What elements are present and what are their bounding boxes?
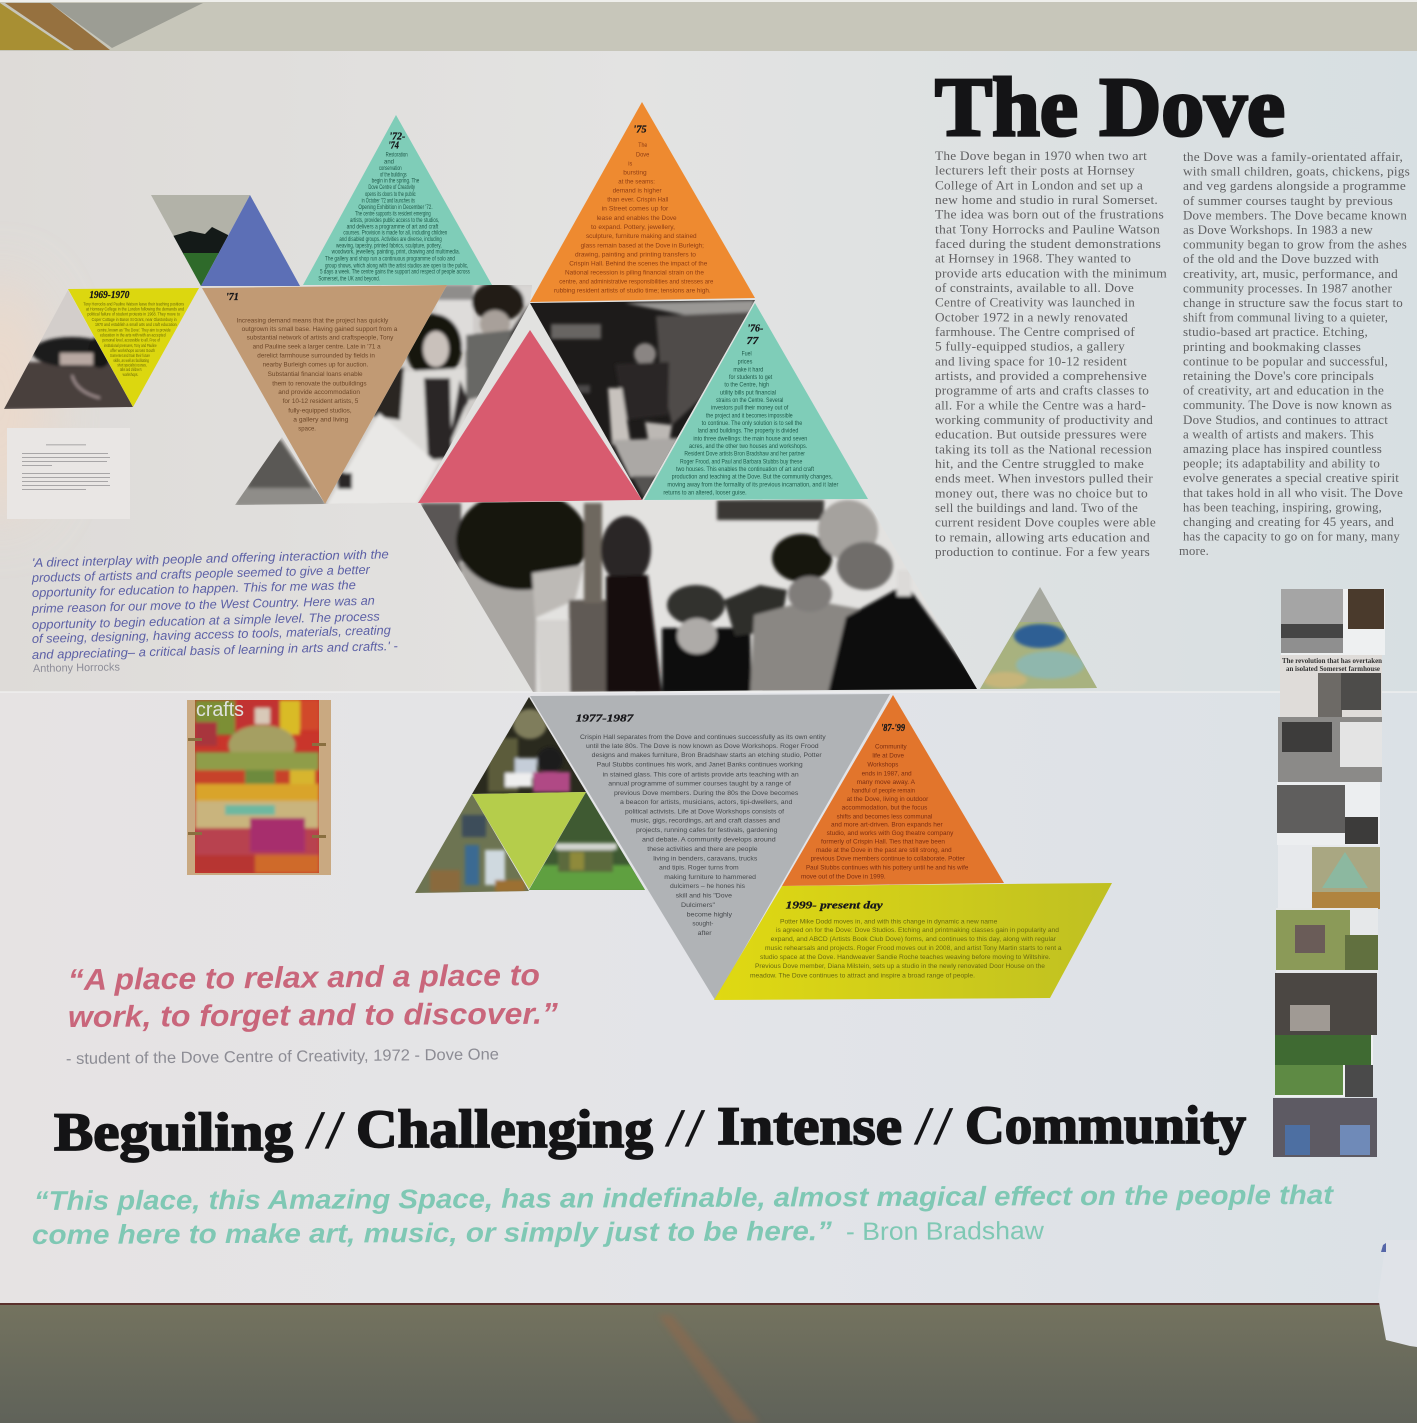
text: 1975 paragraph <box>554 142 714 294</box>
text: 1999 paragraph <box>750 919 1062 980</box>
text block: history column one: at Hornsey in 1968. They wanted to <box>935 251 1131 266</box>
text: 1969-1970 paragraph: 1970 and establish a small arts and craft education <box>95 322 177 327</box>
text: 1971 paragraph: and Pauline seek a larger centre. Late in '71 a <box>253 344 381 351</box>
text block: history column two: that takes hold in all who visit. The Dove <box>1183 485 1403 500</box>
text: 72-74 paragraph: 5 days a week. The centre gains the support and respect of people across <box>320 269 470 276</box>
text block: history column one: that Tony Horrocks and Pauline Watson <box>935 221 1160 236</box>
text: 87-99 paragraph: Community <box>875 744 907 751</box>
text: 87-99 paragraph: and more art-driven. Bron expands her <box>831 821 943 828</box>
text: 1971 paragraph: them to renovate the outbuildings <box>272 380 367 387</box>
text block: history column two: evolve generates a special creative spirit <box>1183 470 1399 485</box>
text block: history column two: Dove Studios, and continues to attract <box>1183 412 1388 427</box>
text: 72-74 paragraph: courses. Provision is made for all, including children <box>343 229 448 236</box>
text: 1975 paragraph: Dove <box>636 151 650 158</box>
triangle: 1972-1974 <box>303 115 492 285</box>
text block: history column one: to remain, allowing arts education and <box>935 529 1150 544</box>
text: 1971 paragraph: a gallery and living <box>293 416 349 423</box>
text: 1977-1987 paragraph: until the late 80s. The Dove is now known as Dove Workshops. Roger Frood <box>586 743 819 750</box>
text: 1969-1970 paragraph: personal level, accessible to all. Free of <box>102 338 160 343</box>
text block: history column two: has the capacity to go on for many, many <box>1183 529 1400 544</box>
text block: history column two: and veg gardens alongside a programme <box>1183 178 1406 193</box>
text block: history column two: of the old and the Dove buzzed with <box>1183 251 1379 266</box>
text: 1977-1987 paragraph: Crispin Hall separates from the Dove and continues successfully as its own entity <box>580 734 827 741</box>
quote: Anthony Horrocks: Anthony Horrocks <box>33 661 121 675</box>
text: 87-99 paragraph: Workshops <box>867 761 898 768</box>
heading: 76-77 <box>747 324 763 347</box>
text block: history column one: faced during the student demonstrations <box>935 236 1161 251</box>
parallelogram: 1999 to present day <box>714 883 1112 1000</box>
text block: history column two: as Dove Workshops. In 1983 a new <box>1183 222 1373 237</box>
text: 87-99 paragraph: formerly of Crispin Hall. Ties that have been <box>821 838 945 845</box>
text: 76-77 paragraph: the project and it becomes impossible <box>706 412 793 419</box>
text: 1969-1970 paragraph: workshops. <box>123 372 138 377</box>
text block: history column one: and living space for 10-12 resident <box>935 353 1127 368</box>
attribution: Bron Bradshaw: - Bron Bradshaw <box>846 1217 1045 1246</box>
text: 72-74 paragraph: woodwork, jewellery, painting, print, drawing and multimedia. <box>331 249 460 256</box>
text block: history column one: sell the buildings and land. Two of the <box>935 500 1138 515</box>
heading: 76-77: 77 <box>747 336 759 347</box>
text: 1999 paragraph: studio space at the Dove. Handweaver Sandie Roche teaches weaving before moving to Wiltshire. <box>760 954 1051 961</box>
text: 72-74 paragraph: weaving, tapestry, printed fabrics, sculpture, pottery, <box>335 242 442 249</box>
text block: history column two <box>1179 149 1410 558</box>
text: 1975 paragraph: to expand. Pottery, jewellery, <box>591 224 675 231</box>
text: 72-74 paragraph: conservation <box>379 165 402 172</box>
quote: Anthony Horrocks: and appreciating– a critical basis of learning in arts and crafts.' - <box>32 639 398 662</box>
text: 1969-1970 paragraph: institutional pressures, Tony and Pauline <box>104 343 157 348</box>
text: 76-77 paragraph: into three dwellings: the main house and seven <box>693 435 808 442</box>
text block: history column one: money out, there was no choice but to <box>935 485 1148 500</box>
text block: history column one: The Dove began in 1970 when two art <box>935 148 1147 163</box>
text: 1977-1987 paragraph: dulcimers – he hones his <box>670 883 745 890</box>
text block: history column one: artists, and provided a comprehensive <box>935 368 1147 383</box>
triangle: lime <box>472 792 586 889</box>
text block: history column two: community began to grow from the ashes <box>1183 237 1407 252</box>
quote: Anthony Horrocks: 'A direct interplay with people and offering interaction with the <box>32 547 389 570</box>
text: 76-77 paragraph: prices <box>738 359 752 366</box>
background: floor <box>0 1304 1417 1423</box>
text: 72-74 paragraph: Dove Centre of Creativity <box>368 184 416 191</box>
triangle: 1976-1977 <box>644 303 868 500</box>
text: 87-99 paragraph: Paul Stubbs continues with his pottery until he and his wife <box>806 864 969 871</box>
text: 1975 paragraph: than ever. Crispin Hall <box>607 197 668 204</box>
text block: history column one: of constraints, available to all. Dove <box>935 280 1134 295</box>
text block: history column two: changing and creating for 45 years, and <box>1183 514 1394 529</box>
text block: history column one: provide arts education with the minimum <box>935 265 1167 280</box>
text: 1975 paragraph: in Street comes up for <box>602 206 668 213</box>
text: 1975 paragraph: glass remain based at the Dove in Burleigh; <box>581 242 704 249</box>
text block: history column two: continue to be popular and successful, <box>1183 353 1388 368</box>
triangle: 1971 <box>202 285 447 504</box>
text: 1969-1970 paragraph: Somerset and train their future <box>110 353 150 358</box>
text block: history column two: with small children, goats, chickens, pigs <box>1183 164 1410 179</box>
text: 76-77 paragraph: to the Centre, high <box>724 382 769 389</box>
text: 87-99 paragraph: ends in 1987, and <box>862 770 912 777</box>
text: 87-99 paragraph: move out of the Dove in 1999. <box>801 873 886 880</box>
text block: history column two: change in structure saw the focus start to <box>1183 295 1403 310</box>
triangle: blue <box>201 195 300 286</box>
text: 1975 paragraph: demand is higher <box>613 188 662 195</box>
text: 1969-1970 paragraph: Tony Horrocks and Pauline Watson leave their teaching positions <box>83 301 184 306</box>
heading: 1969-1970: 1969-1970 <box>89 290 129 301</box>
text: 1971 paragraph <box>237 318 398 433</box>
text block: history column one <box>935 148 1167 559</box>
text block: history column two: creativity, art, music, performance, and <box>1183 266 1398 281</box>
text: 1977-1987 paragraph: become highly <box>687 911 733 918</box>
text block: history column one: working community of productivity and <box>935 412 1153 427</box>
quote: Bron Bradshaw: “This place, this Amazing Space, has an indefinable, almost magical effect on the people that <box>34 1180 1334 1216</box>
heading: 1975: '75 <box>633 125 647 136</box>
headline: four keywords <box>54 1095 1246 1162</box>
text: 1999 paragraph: is agreed on for the Dove: Dove Studios. Etching and printmaking classes gain in popularity and <box>776 927 1059 934</box>
text block: history column two: a wealth of artists and makers. This <box>1183 426 1374 441</box>
text: 1971 paragraph: outgrown its small base. Having gained support from a <box>242 326 398 333</box>
text: 72-74 paragraph: The centre supports its resident emerging <box>355 211 431 218</box>
text: 1975 paragraph: The <box>638 142 648 149</box>
text: 76-77 paragraph: acres, and the other two houses and workshops. <box>689 443 808 450</box>
text block: history column one: hit, and the Centre struggled to make <box>935 456 1144 471</box>
text: 1999 paragraph: meadow. The Dove continues to attract and inspire a broad range of people. <box>750 973 975 980</box>
text: 76-77 paragraph: strains on the Centre. Several <box>716 397 783 404</box>
quote: Anthony Horrocks: prime reason for our move to the West Country. Here was an <box>31 594 375 616</box>
text: 76-77 paragraph: utility bills put financial <box>720 389 776 396</box>
text: 76-77 paragraph: for students to get <box>729 374 773 381</box>
text: 76-77 paragraph: investors pull their money out of <box>711 405 789 412</box>
quote: Bron Bradshaw: come here to make art, music, or simply just to be here.” <box>32 1216 833 1250</box>
photo: house and lawn <box>150 194 252 288</box>
text: 72-74 paragraph: artists, provides public access to the studios, <box>350 217 439 224</box>
text: 1977-1987 paragraph: and debate. A community develops around <box>642 837 776 844</box>
text: 1975 paragraph: rubbing resident artists of studio time; tensions are high. <box>554 287 711 294</box>
text: 1969-1970 paragraph: talks and children's <box>120 367 142 372</box>
text: 1977-1987 paragraph <box>580 734 827 937</box>
heading: 1971: '71 <box>226 292 239 303</box>
text: 72-74 paragraph: opens its doors to the public <box>365 191 416 198</box>
text: 1969-1970 paragraph: short specialist courses, <box>117 362 147 367</box>
text block: history column one: production to continue. For a few years <box>935 544 1150 559</box>
text block: history column one: ends meet. When investors pulled their <box>935 471 1153 486</box>
text: 1977-1987 paragraph: after <box>698 930 712 937</box>
text: 1977-1987 paragraph: in stained glass. This core of artists provide arts teaching with an <box>603 771 799 778</box>
quote: Anthony Horrocks: opportunity to begin education at a simple level. The process <box>32 610 380 632</box>
text block: history column two: has been teaching, inspiring, growing, <box>1183 499 1382 514</box>
text: 1971 paragraph: space. <box>298 426 316 433</box>
text: 1969-1970 paragraph: political failure of student protests in 1968. They move to <box>87 312 180 317</box>
photo: man and girl at workshop <box>470 695 588 795</box>
magazine: crafts cover on board <box>187 699 331 875</box>
text: 76-77 paragraph: returns to an altered, looser guise. <box>663 489 747 496</box>
text: 1977-1987 paragraph: these activities and there are people <box>647 846 758 853</box>
text block: history column one: Centre of Creativity was launched in <box>935 295 1135 310</box>
text block: history column one: all. For a while the Centre was a hard- <box>935 397 1146 412</box>
text: 87-99 paragraph: many move away. A <box>857 779 916 786</box>
quote: Bron Bradshaw <box>32 1180 1334 1250</box>
text: 1999 paragraph: Previous Dove member, Diana Milstein, sets up a studio in the newly renovated Door House on the <box>755 963 1045 970</box>
text: 1969-1970 paragraph: education in the arts with with an accepted <box>100 332 166 337</box>
headline: four keywords: // <box>665 1098 705 1158</box>
text: 72-74 paragraph: and <box>384 158 394 165</box>
text block: history column two: printing and bookmaking classes <box>1183 339 1361 354</box>
quote: Anthony Horrocks: of seeing, designing, having access to tools, materials, creating <box>32 623 391 646</box>
text: 1971 paragraph: substantial network of artists and craftspeople, Tony <box>247 335 394 342</box>
text: 72-74 paragraph: The gallery and shop run a continuous programme of solo and <box>325 255 455 262</box>
text: 76-77 paragraph: production and teaching at the Dove. But the community changes, <box>672 474 833 481</box>
text: 1977-1987 paragraph: designs and makes furniture, Bron Bradshaw starts an etching studio, Potter <box>592 752 822 759</box>
text: 1977-1987 paragraph: projects, running cafes for festivals, gardening <box>636 827 778 834</box>
text: 1971 paragraph: Increasing demand means that the project has quickly <box>237 318 389 325</box>
text: 1971 paragraph: and provide accommodation <box>278 389 360 396</box>
text block: history column one: The idea was born out of the frustrations <box>935 207 1164 222</box>
text: 76-77 paragraph: Roger Frood, and Paul and Barbara Stubbs buy these <box>680 458 803 465</box>
heading: 1977-1987: 1977-1987 <box>576 713 635 724</box>
text: 1999 paragraph: music rehearsals and projects. Roger Frood moves out in 2008, and artist Tony Martin starts to rent a <box>765 945 1062 952</box>
photo: painted car in triangle <box>978 585 1100 690</box>
text: 76-77 paragraph: two houses. This enables the continuation of art and craft <box>676 466 814 473</box>
magazine masthead: crafts <box>196 699 244 721</box>
heading: 72-74: '72- <box>389 131 405 142</box>
text: 72-74 paragraph: Restoration <box>386 152 408 159</box>
text: 1977-1987 paragraph: Paul Stubbs continues his work, and Janet Banks continues working <box>597 761 803 768</box>
text block: history column one: farmhouse. The Centre comprised of <box>935 324 1135 339</box>
headline: four keywords: Community <box>965 1095 1246 1155</box>
text: 1977-1987 paragraph: previous Dove members. During the 80s the Dove becomes <box>614 790 798 797</box>
text: 1975 paragraph: at the seams: <box>618 179 655 186</box>
text: 76-77 paragraph: make it hard <box>733 366 764 373</box>
triangle: 1975 <box>530 102 755 302</box>
text: 72-74 paragraph: of the buildings <box>380 171 407 178</box>
text block: history column one: education. But outside pressures were <box>935 427 1147 442</box>
text: 1977-1987 paragraph: skill and his "Dove <box>676 893 732 900</box>
quote: Anthony Horrocks: opportunity for education to happen. This for me was the <box>32 578 356 600</box>
photo: children gathered <box>415 490 985 694</box>
text block: history column two: studio-based art practice. Etching, <box>1183 324 1368 339</box>
photo: couple, paper and landscape <box>230 282 535 507</box>
text: 87-99 paragraph: made at the Dove in the past are still strong, and <box>816 847 952 854</box>
text: 1969-1970 paragraph: Coper Cottage in Baron St Grant, near Glastonbury in <box>92 317 177 322</box>
text: 1971 paragraph: derelict farmhouse surrounded by fields in <box>257 353 375 360</box>
quote: Anthony Horrocks: products of artists and crafts people seemed to give a better <box>31 563 371 585</box>
text: 1969-1970 paragraph: centre, known as 'The Dove'. They aim to provide <box>97 327 171 332</box>
text block: history column one: taking its toll as the National recession <box>935 441 1152 456</box>
text: 1971 paragraph: fully-equipped studios, <box>288 407 352 414</box>
collage: folded photo strip <box>1273 589 1385 1157</box>
text block: history column two: people; its adaptability and ability to <box>1183 456 1380 471</box>
text: 1977-1987 paragraph: making furniture to hammered <box>664 874 756 881</box>
photo: woman kneading clay <box>528 298 758 503</box>
heading: 87-99: '87-'99 <box>881 723 905 734</box>
text block: history column one: current resident Dove couples were able <box>935 515 1156 530</box>
text: 87-99 paragraph: previous Dove members continue to collaborate. Potter <box>811 855 965 862</box>
triangle: 1977-1987 <box>530 694 890 1000</box>
text: 1971 paragraph: nearby Burleigh comes up for auction. <box>263 362 369 369</box>
text block: history column two: the Dove was a family-orientated affair, <box>1183 149 1403 164</box>
note card: printed summary <box>7 428 130 519</box>
text block: history column two: retaining the Dove's core principals <box>1183 368 1374 383</box>
text: 1977-1987 paragraph: annual programme of summer courses taught by a range of <box>608 780 791 787</box>
text: 72-74 paragraph: Somerset, the UK and beyond. <box>318 275 380 282</box>
triangle: 1987-1999 <box>782 695 1004 886</box>
headline: four keywords: // <box>305 1100 345 1160</box>
heading: 72-74: '74 <box>388 141 399 152</box>
text: 87-99 paragraph <box>801 744 969 880</box>
text: 1977-1987 paragraph: music, gigs, recordings, art and craft classes and <box>631 818 780 825</box>
text: 72-74 paragraph: begin in the spring. The <box>372 178 420 185</box>
heading: 76-77: '76- <box>747 324 763 335</box>
text: 1977-1987 paragraph: a beacon for artists, musicians, actors, tipi-dwellers, and <box>620 799 793 806</box>
background: upper wall and ceiling <box>0 0 1417 52</box>
text: 1975 paragraph: bursting <box>623 170 647 177</box>
triangle: 1969-1970 <box>68 288 199 407</box>
text: 76-77 paragraph: Fuel <box>742 351 752 358</box>
photo: road to the farmhouse <box>0 288 135 410</box>
text: 72-74 paragraph: and delivers a programme of art and craft <box>347 223 439 230</box>
text: 87-99 paragraph: shifts and becomes less communal <box>837 813 932 820</box>
text: 87-99 paragraph: accommodation, but the focus <box>842 805 927 812</box>
text: 72-74 paragraph: Opening Exhibition in December '72. <box>358 204 433 211</box>
text: 1977-1987 paragraph: living in benders, caravans, trucks <box>653 855 757 862</box>
text: 1975 paragraph: centre, and administrative responsibilities and stresses are <box>559 278 714 285</box>
quote: student of the Dove: “A place to relax and a place to <box>68 959 540 997</box>
text block: history column two: shift from communal living to a quieter, <box>1183 310 1388 325</box>
collage: folded photo strip: an isolated Somerset farmhouse <box>1286 665 1380 673</box>
photo: green hut <box>527 790 647 892</box>
text: 1999 paragraph: Potter Mike Dodd moves in, and with this change in dynamic a new name <box>780 919 998 926</box>
text: 72-74 paragraph <box>318 152 470 282</box>
text: 1977-1987 paragraph: political activists. Life at Dove Workshops consists of <box>625 808 784 815</box>
text block: history column two: community processes. In 1987 another <box>1183 280 1392 295</box>
text block: history column two: of summer courses taught by previous <box>1183 193 1393 208</box>
text: 76-77 paragraph: Resident Dove artists Bron Bradshaw and her partner <box>684 451 805 458</box>
text: 1975 paragraph: is <box>628 160 632 167</box>
text: 76-77 paragraph: to continue. The only solution is to sell the <box>702 420 803 427</box>
text: 87-99 paragraph: at the Dove, living in outdoor <box>847 796 928 803</box>
heading: 72-74 <box>388 131 405 152</box>
text block: history column one: programme of arts and crafts classes to <box>935 383 1149 398</box>
text: 87-99 paragraph: handful of people remain <box>852 788 915 795</box>
quote: student of the Dove <box>66 959 558 1068</box>
text: 1975 paragraph: Crispin Hall. Behind the scenes the impact of the <box>569 260 708 267</box>
text: 1969-1970 paragraph: offer workshops across South <box>110 348 155 353</box>
text: 1971 paragraph: Substantial financial loans enable <box>268 371 363 378</box>
text: 1999 paragraph: expand, and ABCD (Artists Book Club Dove) forms, and continues to this day, along with regular <box>771 936 1056 943</box>
text: 72-74 paragraph: group shows, which along with the artist studios are open to the public, <box>325 262 468 269</box>
photo: painted interior <box>413 792 531 895</box>
text block: history column two: of creativity, art and education in the <box>1183 383 1384 398</box>
text: 72-74 paragraph: and disabled groups. Activities are diverse, including <box>339 236 442 243</box>
text: 1969-1970 paragraph <box>83 301 184 377</box>
heading: 1999- present day: 1999- present day <box>786 900 883 911</box>
headline: four keywords: Intense <box>717 1096 902 1156</box>
text: 1977-1987 paragraph: Dulcimers" <box>681 902 715 909</box>
text block: history column two: community. The Dove is now known as <box>1183 397 1392 412</box>
title: The Dove <box>935 61 1285 154</box>
headline: four keywords: Challenging <box>356 1099 653 1159</box>
text: 87-99 paragraph: life at Dove <box>872 753 904 760</box>
triangle: pink <box>418 330 642 503</box>
text: 76-77 paragraph: moving away from the formality of its previous incarnation, and it later <box>667 481 838 488</box>
quote: Anthony Horrocks <box>31 547 398 675</box>
collage: folded photo strip: The revolution that has overtaken <box>1282 657 1382 665</box>
text block: history column two: Dove members. The Dove became known <box>1183 207 1407 222</box>
text block: history column one: new home and studio in rural Somerset. <box>935 192 1158 207</box>
quote: student of the Dove: work, to forget and to discover.” <box>68 998 558 1034</box>
headline: four keywords: Beguiling <box>54 1102 293 1162</box>
text: 1975 paragraph: lease and enables the Dove <box>597 215 677 222</box>
text block: history column one: October 1972 in a newly renovated <box>935 309 1128 324</box>
text: 1975 paragraph: drawing, painting and printing transfers to <box>575 251 696 258</box>
text: 1969-1970 paragraph: at Hornsey College in the London following the demands and <box>86 307 184 312</box>
text: 1977-1987 paragraph: sought- <box>692 921 713 928</box>
text block: history column two: amazing place has inspired countless <box>1183 441 1382 456</box>
text: 1969-1970 paragraph: skills, as well as facilitating <box>113 358 149 363</box>
text: 87-99 paragraph: studio, and works with Gog theatre company <box>827 830 954 837</box>
text: 1977-1987 paragraph: and tipis. Roger turns from <box>659 865 739 872</box>
text block: history column two: more. <box>1179 543 1209 558</box>
text: 1975 paragraph: National recession is piling financial strain on the <box>565 269 704 276</box>
text: 76-77 paragraph <box>663 351 838 496</box>
text: 76-77 paragraph: land and buildings. The property is divided <box>698 428 799 435</box>
text: 1975 paragraph: sculpture, furniture making and stained <box>586 233 697 240</box>
attribution: student: - student of the Dove Centre of Creativity, 1972 - Dove One <box>66 1046 499 1068</box>
text block: history column one: lecturers left their posts at Hornsey <box>935 163 1135 178</box>
headline: four keywords: // <box>914 1096 953 1156</box>
text block: history column one: College of Art in London and set up a <box>935 177 1143 192</box>
text: 72-74 paragraph: in October '72 and launches its <box>362 198 415 205</box>
text block: history column one: 5 fully-equipped studios, a gallery <box>935 339 1125 354</box>
text: 1971 paragraph: for 10-12 resident artists, 5 <box>283 398 359 405</box>
